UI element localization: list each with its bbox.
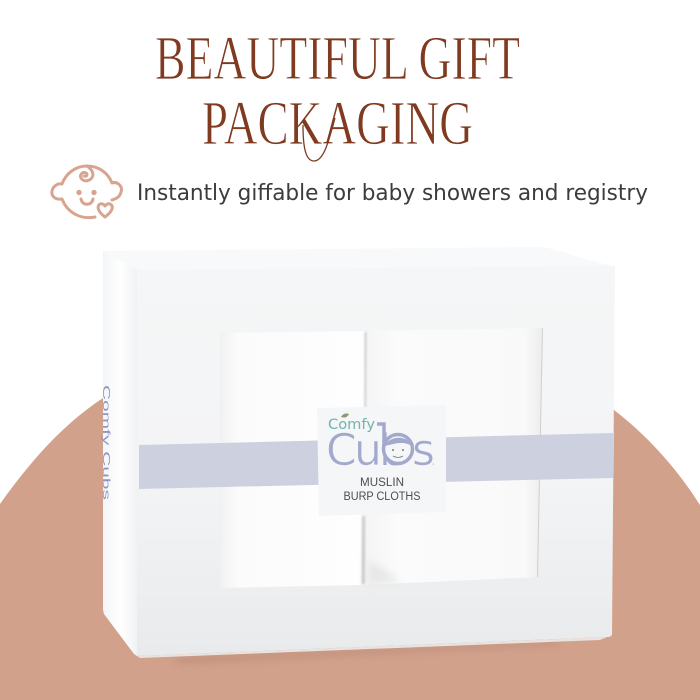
logo word Cubs: Cubs	[326, 425, 435, 476]
label text: muslin burp cloths: BURP CLOTHS	[344, 491, 421, 503]
lavender belly band	[139, 433, 613, 489]
icon: baby face with heart	[52, 166, 121, 218]
box left side panel	[103, 251, 138, 656]
logo word Cubs: .	[431, 453, 435, 469]
cloth divider shadow	[362, 332, 366, 584]
gift box	[100, 247, 615, 664]
peach background arc	[0, 356, 700, 700]
title: PACKAGING	[202, 90, 473, 158]
label text: muslin burp cloths	[344, 477, 421, 503]
side panel logo text: Comfy Cubs	[100, 385, 111, 500]
box bottom edge	[137, 637, 607, 658]
logo word Comfy: Comfy	[328, 417, 375, 433]
cloth fold shading	[368, 560, 400, 584]
box top flap	[103, 247, 615, 272]
window with muslin cloths	[220, 328, 543, 588]
window inner edge	[537, 328, 543, 577]
right cloth	[362, 328, 543, 585]
logo b stem	[377, 424, 384, 450]
logo leaf	[341, 413, 349, 418]
title: BEAUTIFUL GIFT	[155, 25, 520, 93]
box shadow	[170, 640, 560, 664]
title	[155, 25, 520, 161]
product label card	[317, 405, 446, 516]
box front panel	[137, 266, 615, 656]
logo baby face	[384, 434, 412, 464]
label background	[317, 405, 446, 516]
left cloth	[220, 331, 365, 588]
label text: muslin burp cloths: MUSLIN	[360, 477, 404, 489]
subtitle text: Instantly giffable for baby showers and registry	[137, 181, 648, 206]
